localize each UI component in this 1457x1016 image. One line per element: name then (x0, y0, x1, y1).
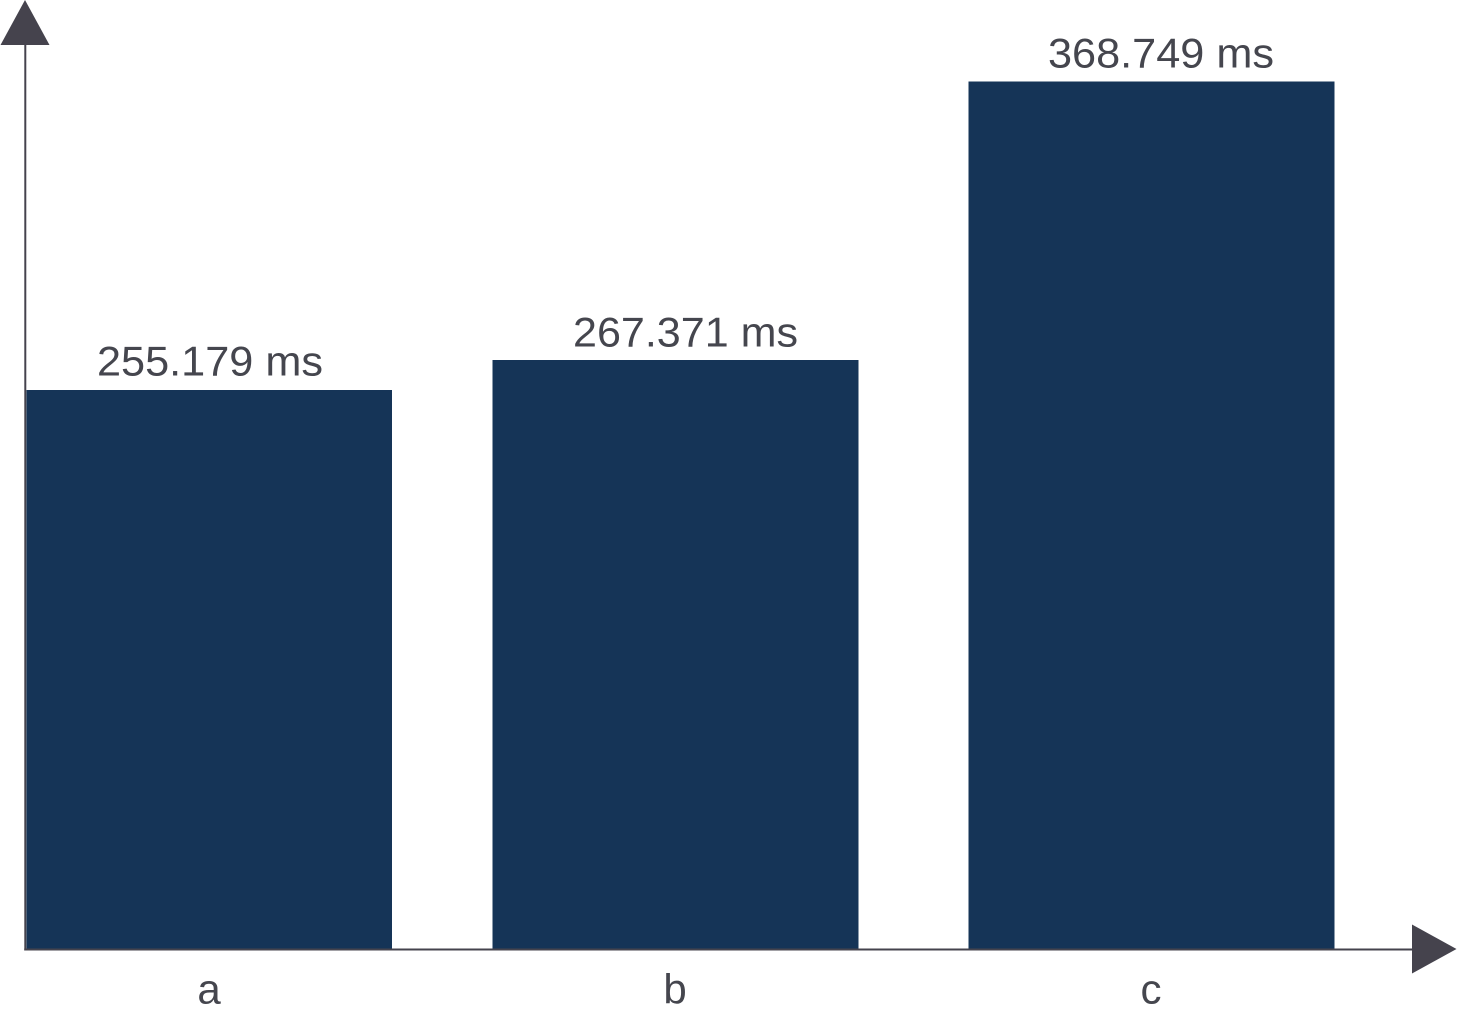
value label c: 368.749 ms (1048, 30, 1274, 76)
category label a: a (197, 966, 221, 1012)
bar a (26, 390, 392, 949)
category label b: b (663, 966, 687, 1012)
bar b (492, 360, 858, 949)
y axis arrow (0, 0, 50, 950)
value label a: 255.179 ms (97, 338, 323, 384)
category label c: c (1140, 966, 1162, 1012)
bar c (968, 82, 1334, 949)
x axis arrow (24, 924, 1456, 974)
value label b: 267.371 ms (573, 308, 798, 356)
